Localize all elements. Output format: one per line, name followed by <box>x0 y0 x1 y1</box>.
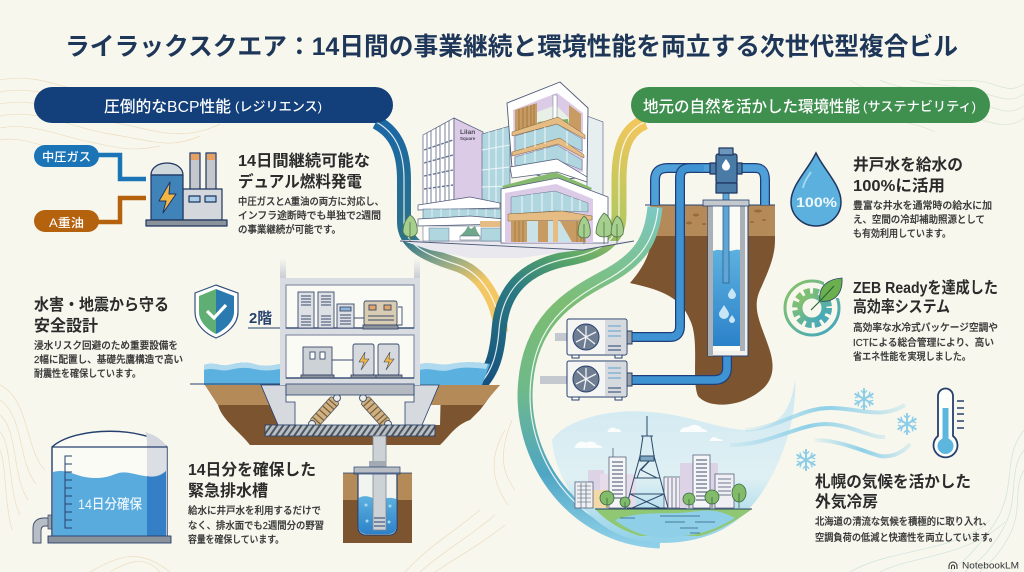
text: well water: も有効利用しています。 <box>853 227 951 240</box>
text: emergency drainage tank: なく、排水面でも2週間分の野習 <box>188 519 324 532</box>
icon: snowflakes <box>797 389 916 470</box>
podium <box>501 178 608 243</box>
icon: dual fuel power plant <box>146 153 227 226</box>
trees <box>600 484 746 508</box>
panel: building: Square <box>460 136 476 141</box>
tank label: 14日分確保 <box>78 496 142 512</box>
label: second floor <box>248 310 280 328</box>
flood water <box>190 362 490 385</box>
text: emergency drainage tank: 容量を確保しています。 <box>188 533 284 546</box>
text: outside air cooling: 空調負荷の低減と快適性を両立しています。 <box>815 531 998 544</box>
text: dual fuel generation: 中圧ガスとA重油の両方に対応し、 <box>238 195 384 208</box>
label: medium pressure gas: 中圧ガス <box>42 149 91 164</box>
panel: building <box>400 82 634 258</box>
text: outside air cooling <box>815 472 998 544</box>
text: ZEB Ready: 高効率システム <box>853 297 950 316</box>
pipes <box>540 168 765 380</box>
text: outside air cooling: 外気冷房 <box>815 492 878 511</box>
text: flood and earthquake safety: 2幅に配置し、基礎先鷹構造で高い <box>34 353 183 366</box>
planter <box>460 226 480 236</box>
text: outside air cooling: 札幌の気候を活かした <box>815 472 971 491</box>
left tower <box>423 118 454 208</box>
icon: wellhead valve <box>710 148 742 193</box>
text: dual fuel generation: 14日間継続可能な <box>238 151 370 170</box>
text: well water: 豊富な井水を通常時の給水に加 <box>853 199 992 212</box>
lower floors <box>418 197 500 210</box>
illustration: building section <box>280 258 420 395</box>
tower blocks <box>575 448 734 508</box>
ribbon: city flow <box>525 207 660 541</box>
text: well water: 井戸水を給水の <box>853 156 963 174</box>
ribbon: resilience flow <box>376 122 501 332</box>
ac unit one <box>567 319 632 358</box>
fuel inputs <box>34 145 146 232</box>
text: ZEB Ready: ZEB Readyを達成した <box>853 278 998 297</box>
text: flood and earthquake safety: 浸水リスク回避のため重要設備を <box>34 339 178 352</box>
panel heading: sustainability: (サステナビリティ) <box>863 99 976 114</box>
panel heading: sustainability <box>631 87 990 123</box>
text: dual fuel generation <box>238 151 384 236</box>
casing <box>708 205 748 356</box>
panel heading: resilience <box>34 87 393 123</box>
damper left <box>310 396 339 427</box>
text: dual fuel generation: デュアル燃料発電 <box>238 172 362 191</box>
green roof <box>502 172 592 191</box>
NotebookLM mark: NotebookLM <box>962 560 1019 572</box>
icon: eco gear <box>785 276 846 335</box>
text: well water <box>853 156 992 240</box>
text: emergency drainage tank: 14日分を確保した <box>188 460 316 479</box>
trees <box>403 213 623 244</box>
text: ZEB Ready: 高効率な水冷式パッケージ空調や <box>853 321 998 334</box>
first floor equipment <box>301 344 402 378</box>
glass curtain wall <box>482 126 510 204</box>
label: second floor: 2階 <box>249 310 272 327</box>
panel heading: resilience: 圧倒的なBCP性能 <box>104 98 231 116</box>
ribbon: sustainability flow <box>478 122 645 386</box>
upper block <box>507 82 588 180</box>
panel heading: resilience: (レジリエンス) <box>235 99 322 114</box>
text: ZEB Ready: ICTによる総合管理により、高い <box>853 336 994 349</box>
ac unit two <box>567 361 632 400</box>
rear slab <box>587 116 603 196</box>
panel heading: sustainability: 地元の自然を活かした環境性能 <box>643 98 860 116</box>
text: outside air cooling: 北海道の清流な気候を積極的に取り入れ、 <box>815 515 992 528</box>
text: ZEB Ready: 省エネ性能を実現しました。 <box>853 350 971 363</box>
text: flood and earthquake safety <box>34 295 183 380</box>
label: heavy oil: A重油 <box>49 215 84 230</box>
icon: water drop 100% <box>791 153 841 226</box>
ground with foundation <box>205 385 500 445</box>
icon: water drop 100%: 100% <box>796 194 838 210</box>
icon: drainage pit <box>343 436 412 543</box>
illustration: sapporo city <box>552 380 795 543</box>
illustration: well system <box>540 148 765 400</box>
icon: emergency water tank <box>33 431 171 543</box>
wind flow <box>730 405 910 456</box>
icon: thermometer <box>934 389 964 457</box>
text: dual fuel generation: インフラ途断時でも単独で2週間 <box>238 209 381 222</box>
text: well water: 100%に活用 <box>853 177 945 195</box>
text: dual fuel generation: の事業継続が可能です。 <box>238 223 341 236</box>
decorative contours <box>0 78 515 572</box>
text: emergency drainage tank: 緊急排水槽 <box>188 482 268 500</box>
text: ZEB Ready <box>853 278 998 363</box>
damper right <box>361 396 390 427</box>
title: ライラックスクエア：14日間の事業継続と環境性能を両立する次世代型複合ビル <box>65 33 958 61</box>
river park <box>595 509 752 536</box>
text: emergency drainage tank <box>188 460 324 546</box>
text: emergency drainage tank: 給水に井戸水を利用するだけで <box>188 504 321 517</box>
illustration: well ground <box>630 205 775 405</box>
icon: shield <box>195 285 238 338</box>
sign: Lilan <box>460 129 475 136</box>
second floor equipment <box>298 292 402 329</box>
icon: sapporo tv tower <box>626 416 668 508</box>
text: flood and earthquake safety: 耐震性を確保しています。 <box>34 367 141 380</box>
text: flood and earthquake safety: 水害・地震から守る <box>34 295 169 314</box>
text: well water: え、空間の冷却補助照源として <box>853 213 985 226</box>
text: flood and earthquake safety: 安全設計 <box>34 316 98 335</box>
icon: seismic foundation <box>261 385 439 436</box>
ground plaza <box>400 240 632 258</box>
